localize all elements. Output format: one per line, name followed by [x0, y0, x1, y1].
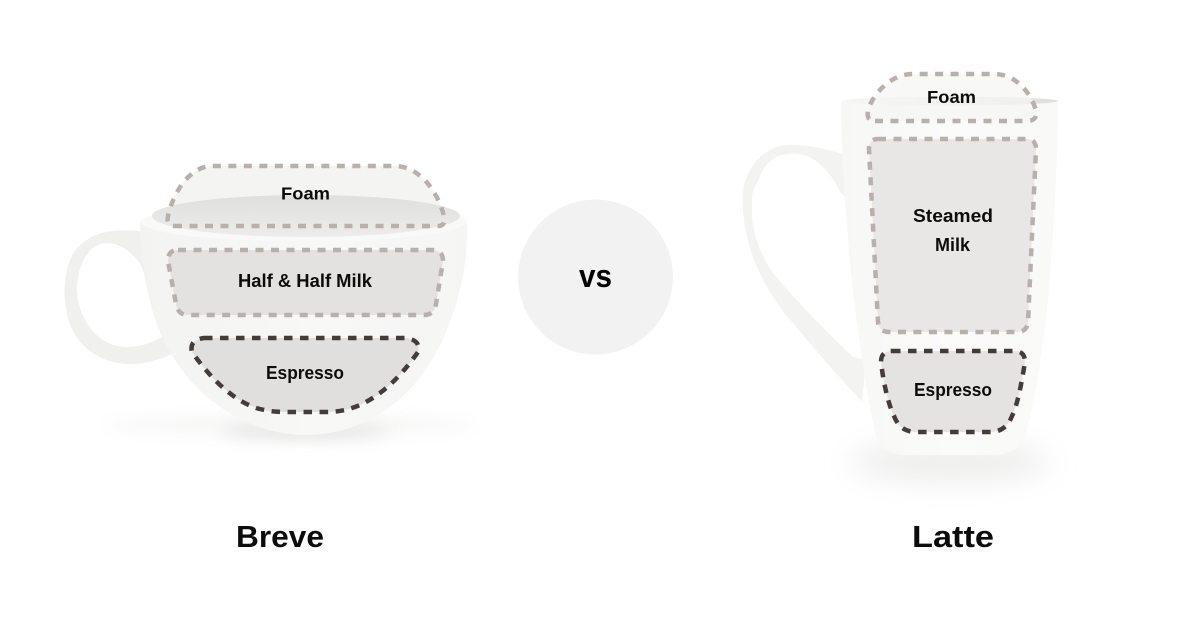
icon: breve cup interior [152, 195, 460, 237]
foam region [868, 74, 1036, 121]
panel: VS badge [518, 200, 673, 354]
foam region fill [168, 166, 444, 226]
icon: breve cup handle [65, 230, 175, 364]
label: Foam: Foam [281, 184, 330, 204]
label: Espresso: Espresso [266, 363, 344, 383]
label: Espresso: Espresso [914, 380, 992, 400]
label: Half & Half Milk: Half & Half Milk [238, 271, 373, 291]
icon: latte mug body [841, 102, 1058, 455]
panel: Latte mug diagram [743, 74, 1058, 482]
title: Latte: Latte [912, 519, 994, 554]
mug shadow [850, 442, 1050, 482]
steamed milk region [869, 139, 1036, 332]
icon: latte mug rim [842, 96, 1058, 106]
label: Foam: Foam [927, 87, 976, 107]
label: Milk: Milk [935, 235, 971, 255]
title: Breve: Breve [236, 519, 324, 554]
half and half milk region [168, 250, 443, 315]
label: Steamed: Steamed [913, 206, 993, 226]
espresso region [192, 338, 418, 412]
label: vs: vs [579, 258, 612, 294]
cup shadow [105, 416, 475, 438]
foam region outline [168, 166, 444, 226]
icon: breve cup rim [140, 200, 467, 241]
espresso region [881, 351, 1025, 432]
panel: Breve cup diagram [65, 166, 475, 438]
icon: latte mug handle [743, 145, 866, 402]
badge circle [518, 200, 673, 354]
icon: breve cup bowl [140, 222, 467, 435]
